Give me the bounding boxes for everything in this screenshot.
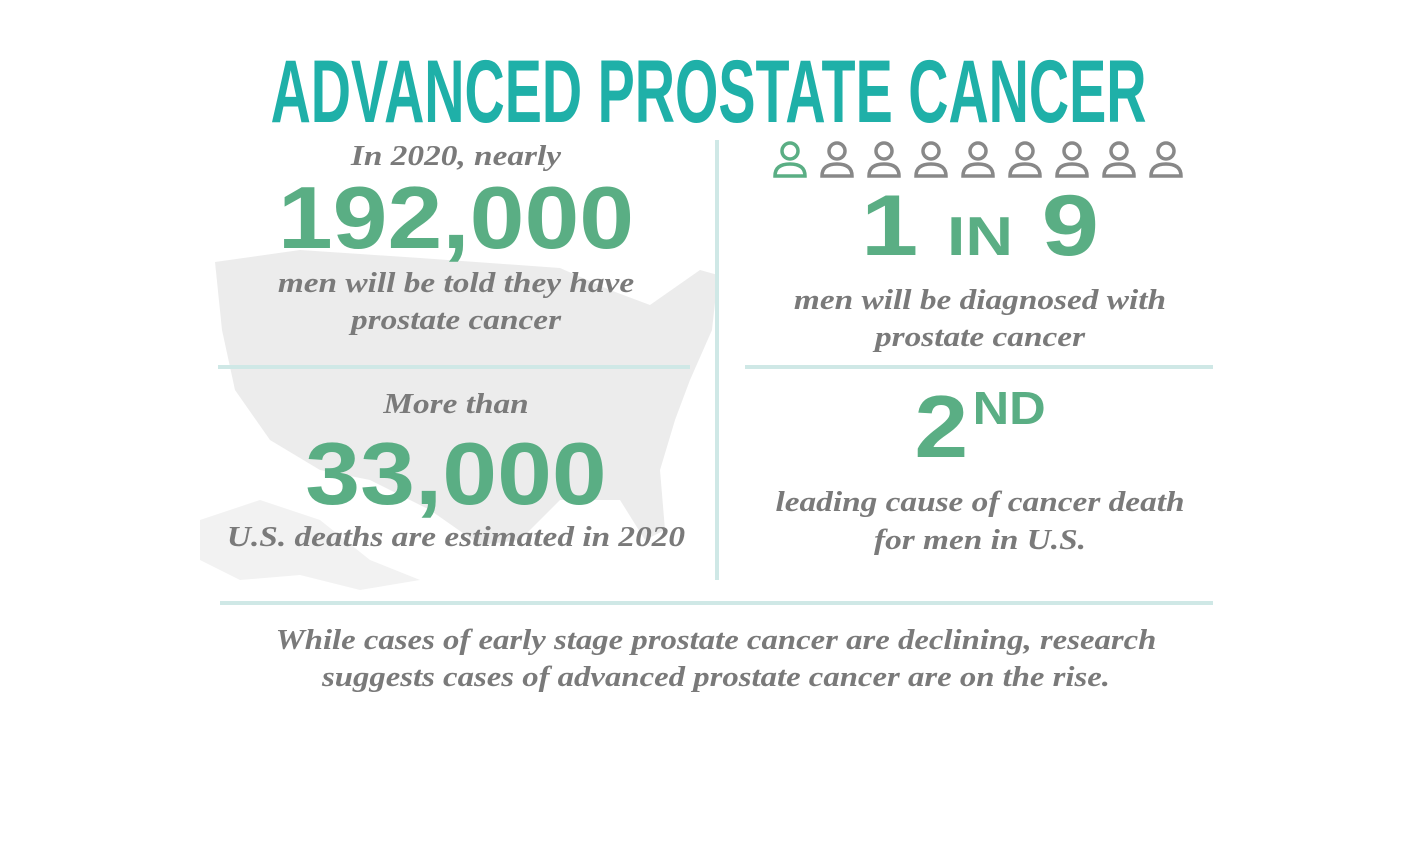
statistic 1 in 9: 1 IN 9 [861, 178, 1099, 274]
description: men will be told they have [278, 268, 634, 299]
panel: new cases [278, 141, 634, 336]
footer text [276, 625, 1156, 693]
panel: 1 in 9 [773, 141, 1183, 353]
description [794, 285, 1166, 353]
right divider [745, 365, 1213, 369]
description: for men in U.S. [874, 525, 1086, 556]
description: men will be diagnosed with [794, 285, 1166, 316]
description: leading cause of cancer death [775, 487, 1185, 518]
vertical divider [715, 140, 719, 580]
description [278, 268, 634, 336]
number 192,000: 192,000 [278, 168, 634, 267]
intro text: More than [383, 389, 529, 420]
footer text: While cases of early stage prostate cancer are declining, research [276, 625, 1156, 656]
description [775, 487, 1185, 556]
icons: people [773, 141, 1183, 178]
footer text: suggests cases of advanced prostate cancer are on the rise. [322, 662, 1110, 693]
description: prostate cancer [875, 322, 1085, 353]
intro text: In 2020, nearly [351, 141, 561, 172]
statistic 2nd: 2ND [914, 377, 1046, 476]
panel: 2nd leading cause [775, 377, 1185, 556]
number 33,000: 33,000 [305, 424, 607, 523]
title: ADVANCED PROSTATE CANCER [271, 41, 1147, 141]
panel: deaths [227, 389, 685, 553]
bottom divider [220, 601, 1213, 605]
left divider [218, 365, 690, 369]
description: U.S. deaths are estimated in 2020 [227, 522, 685, 553]
description: prostate cancer [351, 305, 561, 336]
